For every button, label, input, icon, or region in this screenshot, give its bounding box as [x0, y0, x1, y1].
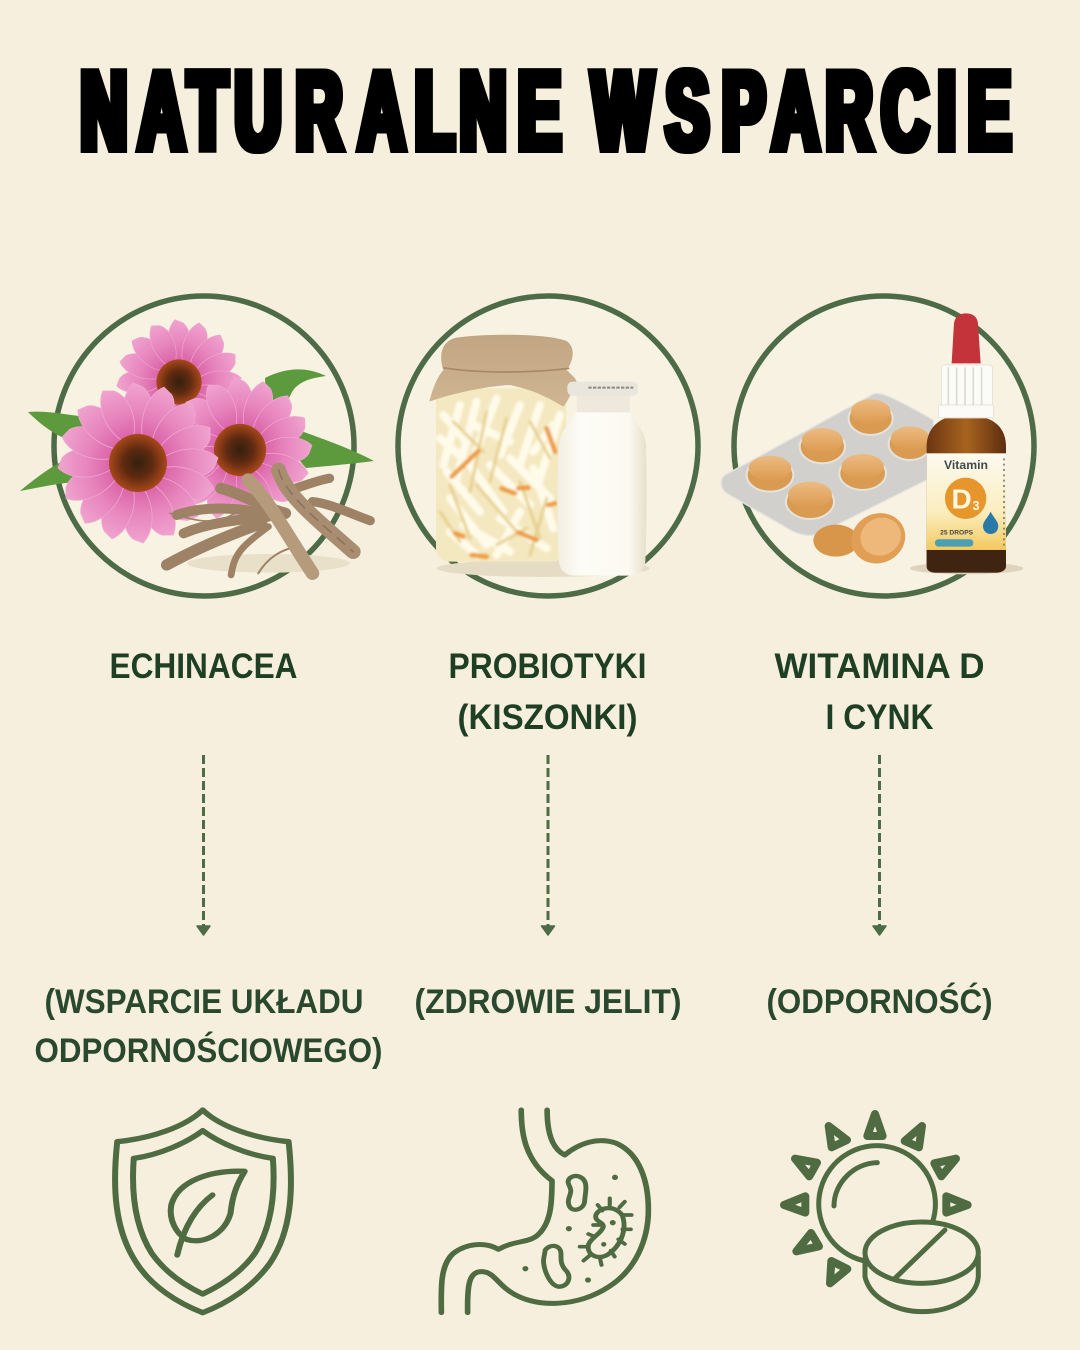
column 3 circle	[734, 296, 1034, 596]
shadow	[437, 560, 650, 577]
photo: sauerkraut jar and milk bottle	[429, 335, 650, 577]
jar	[429, 335, 577, 562]
label: drops: 25 DROPS	[940, 529, 974, 536]
flower: right	[168, 378, 312, 522]
photo: echinacea flowers and roots	[20, 320, 374, 575]
blister pack	[721, 393, 933, 535]
leaves	[20, 369, 374, 491]
lid	[429, 335, 577, 407]
D3 badge	[945, 478, 986, 519]
label: Vitamin: Vitamin	[944, 458, 988, 472]
arrow: column 1	[197, 755, 210, 935]
benefit: immune support	[34, 983, 382, 1070]
benefit: gut health: (ZDROWIE JELIT)	[414, 983, 682, 1021]
column 2 circle	[398, 296, 698, 596]
roots	[167, 470, 370, 575]
icon: sun with tablet	[784, 1114, 978, 1312]
icon: shield with leaf	[115, 1110, 291, 1313]
benefit: immune support: (WSPARCIE UKŁADU	[44, 983, 364, 1021]
label: vitamin D and zinc: WITAMINA D	[774, 647, 984, 686]
loose lozenges	[813, 504, 914, 572]
milk bottle	[558, 382, 647, 576]
label: vitamin D and zinc	[774, 647, 984, 737]
label: vitamin D and zinc: I CYNK	[826, 698, 934, 737]
benefit: immune support: ODPORNOŚCIOWEGO)	[34, 1032, 382, 1070]
title: NATURALNE WSPARCIE	[81, 50, 1011, 173]
flower: top	[117, 320, 241, 444]
water drop	[983, 512, 998, 534]
label: probiotics	[448, 647, 646, 737]
label: echinacea: ECHINACEA	[110, 647, 298, 686]
arrow: column 3	[873, 755, 886, 935]
dropper bottle	[910, 313, 1023, 574]
column 1 circle	[54, 296, 354, 596]
label: probiotics: (KISZONKI)	[458, 698, 638, 737]
photo: zinc lozenges and vitamin D3 bottle	[721, 313, 1023, 574]
flower: front	[58, 383, 218, 543]
arrow: column 2	[542, 755, 554, 935]
benefit: immunity: (ODPORNOŚĆ)	[766, 983, 992, 1021]
label: probiotics: PROBIOTYKI	[448, 647, 646, 686]
D3 badge: 3	[972, 499, 979, 513]
D3 badge: D	[952, 483, 972, 514]
icon: stomach with bacteria	[441, 1110, 648, 1313]
